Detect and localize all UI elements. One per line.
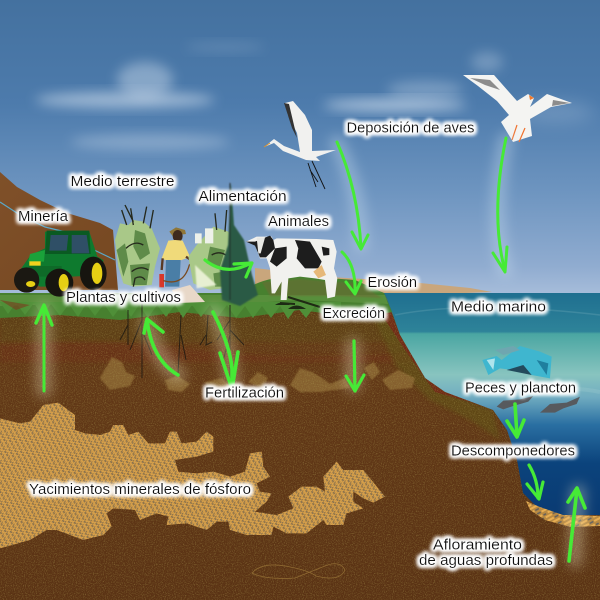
label: Animales: Animales	[268, 213, 329, 230]
label: de aguas profundas: de aguas profundas	[419, 552, 553, 569]
sea	[375, 293, 600, 520]
sand under farmer	[172, 285, 205, 303]
label: Plantas y cultivos: Plantas y cultivos	[66, 289, 181, 306]
label: Descomponedores: Descomponedores	[451, 442, 575, 460]
label: Medio marino: Medio marino	[451, 298, 546, 316]
arrow: excreción down	[346, 341, 364, 391]
label: Yacimientos minerales de fósforo: Yacimientos minerales de fósforo	[29, 481, 251, 498]
sprayed plants and mist	[188, 210, 238, 290]
label: Deposición de aves: Deposición de aves	[346, 120, 474, 136]
label: Peces y plancton: Peces y plancton	[465, 380, 576, 396]
label: Erosión: Erosión	[368, 274, 417, 291]
arrow: seagull down	[493, 138, 507, 272]
fertilizer patches	[100, 357, 415, 392]
mineral phosphorus deposit	[0, 403, 385, 548]
cow	[246, 236, 337, 300]
arrow: deposición de aves	[337, 142, 368, 249]
roots	[120, 300, 244, 380]
sea currents	[395, 308, 600, 395]
soil upper layers	[56, 294, 498, 437]
farmer with sprayer	[159, 227, 195, 287]
arrow: excreta down	[342, 252, 361, 294]
label: Fertilización: Fertilización	[205, 384, 284, 402]
cow shadow	[275, 302, 306, 309]
arrow: peces down	[507, 404, 524, 437]
seagull	[463, 75, 572, 142]
label: Excreción: Excreción	[322, 305, 385, 322]
sky background	[0, 0, 600, 296]
arrow glows	[44, 140, 578, 560]
heron	[264, 101, 336, 189]
arrow: fertilización down	[213, 312, 238, 389]
fish	[482, 346, 552, 378]
label: Alimentación: Alimentación	[198, 188, 286, 205]
arrow: descomponedores down	[527, 465, 543, 499]
arrow: plantas up	[144, 319, 178, 375]
label: Medio terrestre: Medio terrestre	[70, 173, 174, 190]
clouds	[35, 42, 595, 150]
label: Afloramiento: Afloramiento	[433, 536, 522, 554]
distant beach	[255, 268, 492, 294]
grass band	[0, 276, 392, 320]
soil ground	[0, 296, 600, 600]
arrow: afloramiento up	[568, 488, 585, 561]
arrow: alimentación	[205, 260, 252, 277]
arrow: minería up	[36, 305, 52, 391]
tractor	[14, 231, 107, 297]
corn plants left	[115, 205, 160, 287]
seabed sediment	[526, 501, 600, 527]
small fish	[497, 396, 580, 413]
signature	[252, 564, 345, 578]
river on mountain	[0, 202, 115, 260]
noise texture	[0, 296, 600, 600]
dark shrub	[220, 183, 258, 306]
label: Minería: Minería	[18, 208, 69, 225]
mountain	[0, 172, 118, 290]
